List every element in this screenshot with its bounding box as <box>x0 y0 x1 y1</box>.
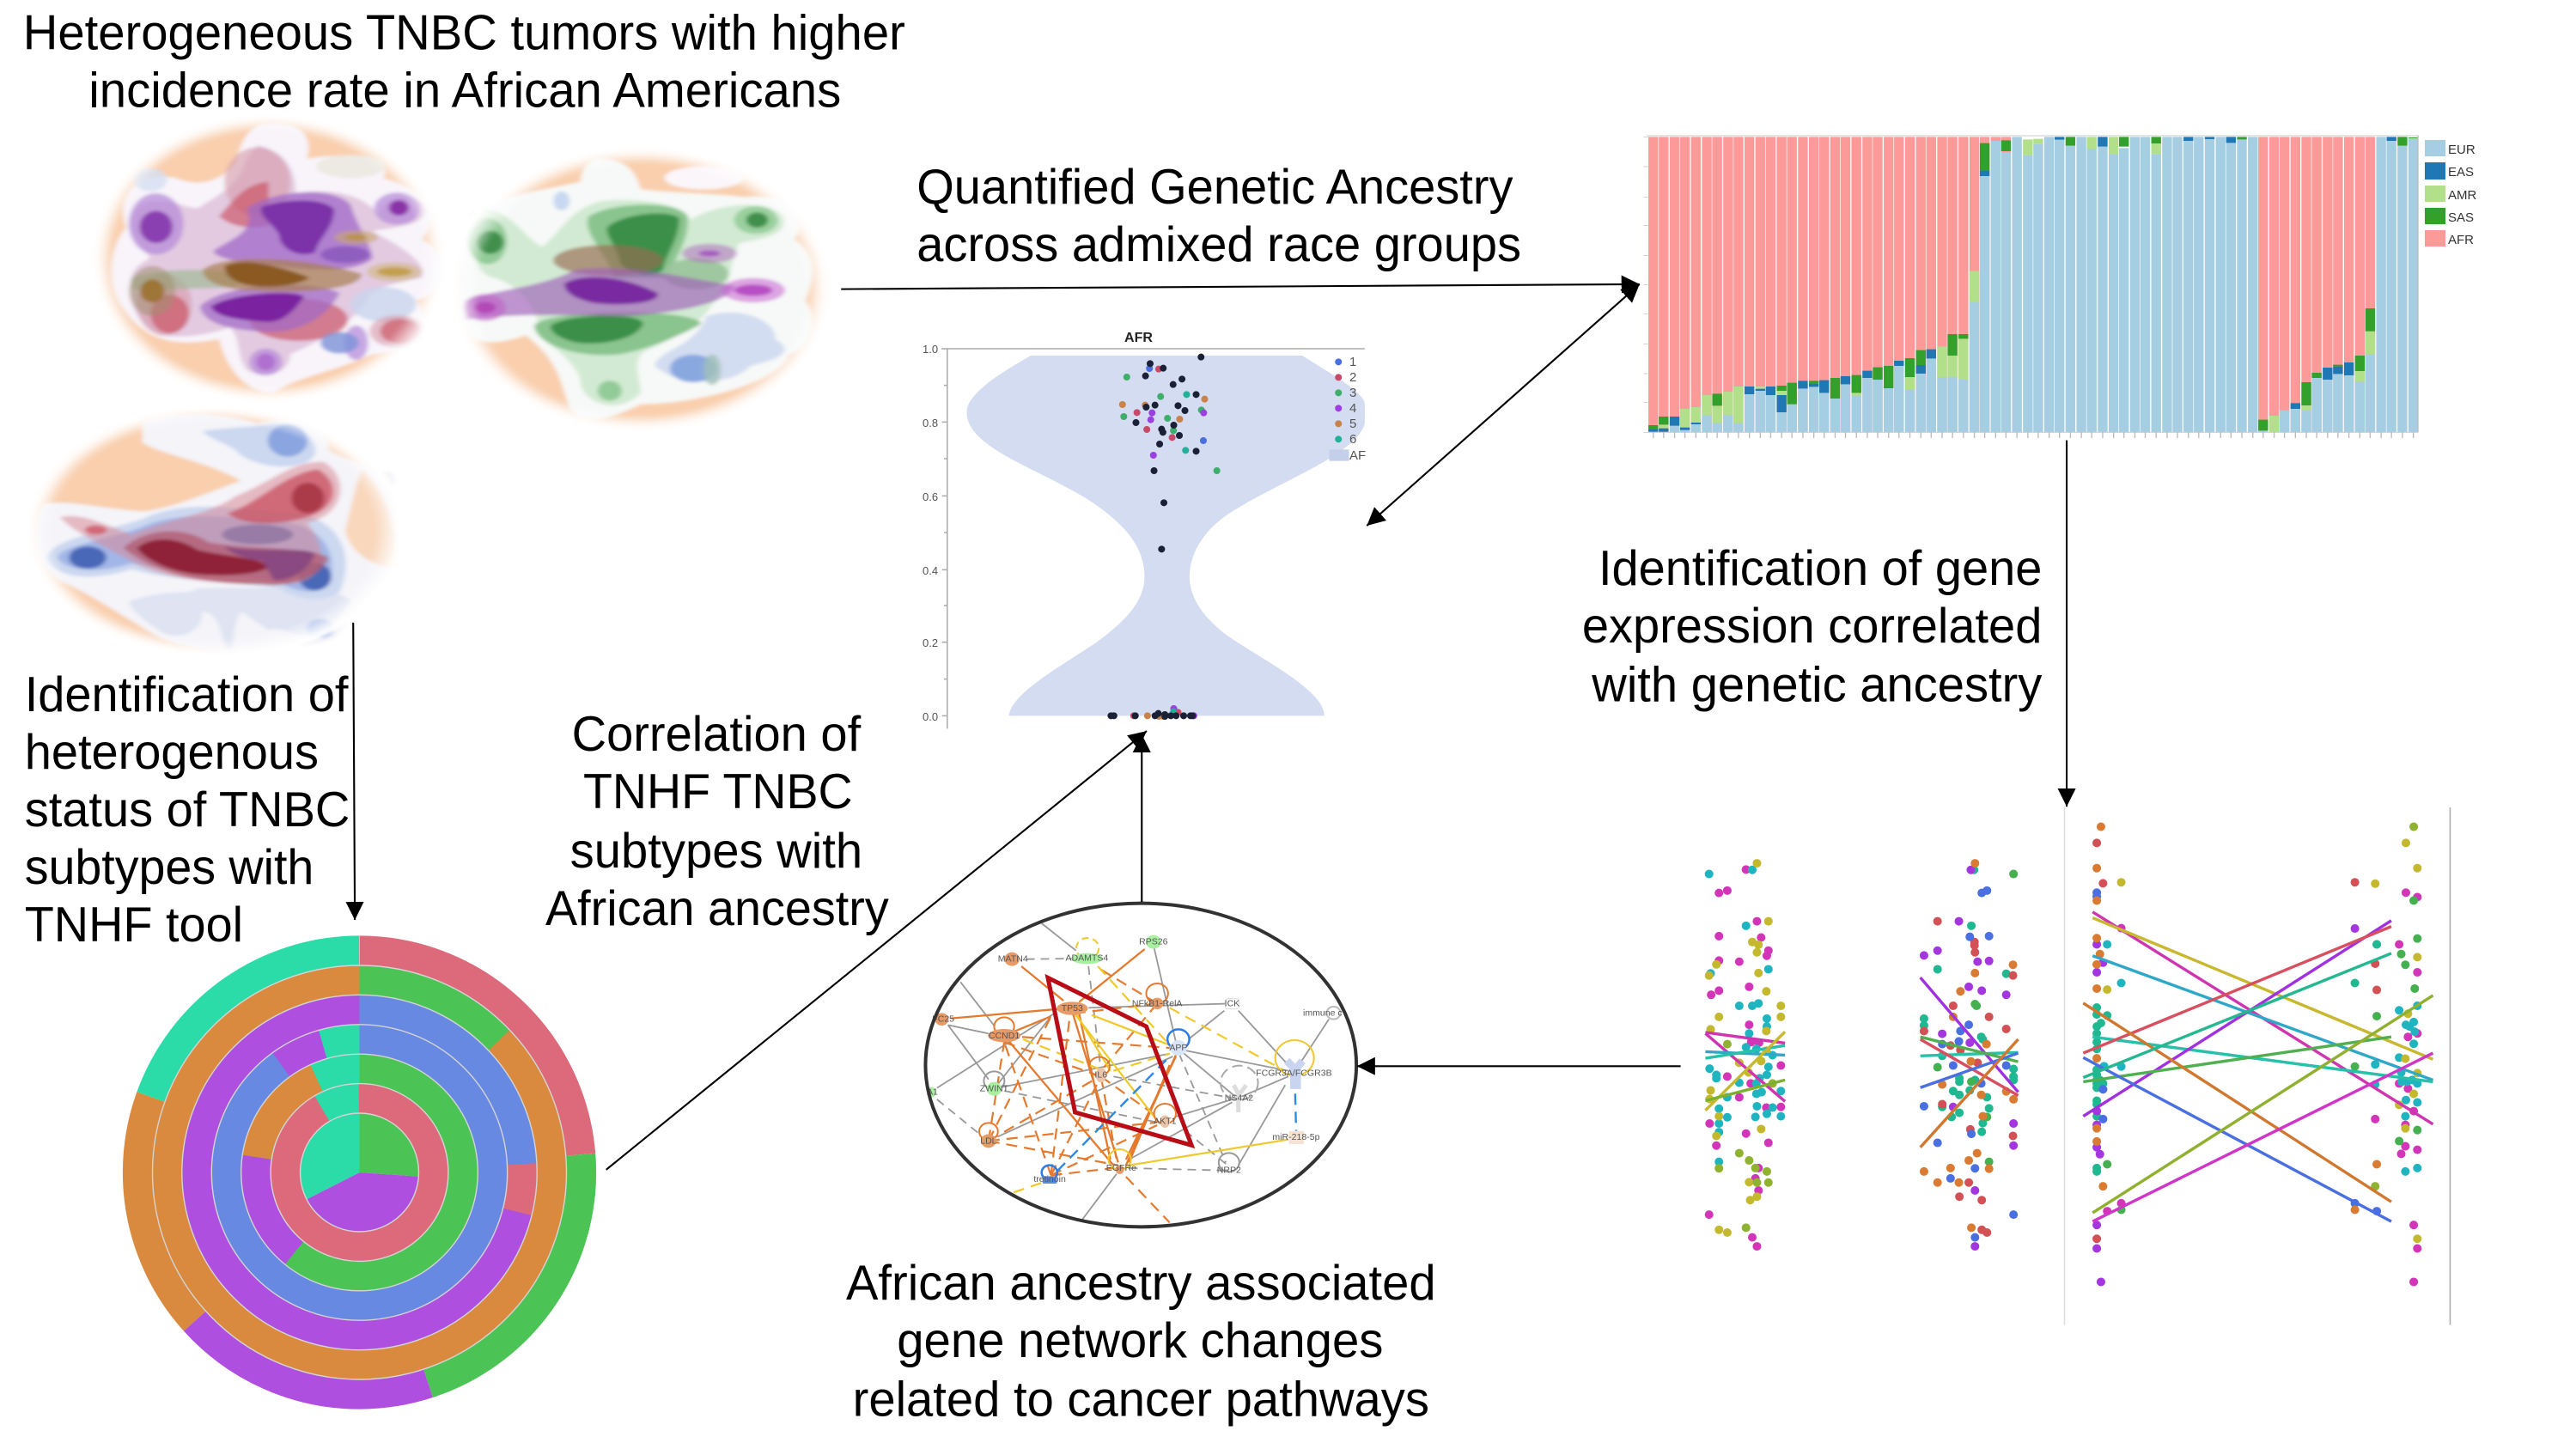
gene network in ellipse: CCND1 <box>989 1032 1020 1041</box>
gene network in ellipse: NS4A2 <box>1225 1094 1254 1104</box>
caption: gene expression: Identification of gene <box>1599 541 2042 596</box>
caption: correlation <box>545 707 889 936</box>
bar chart legend <box>2425 140 2477 247</box>
arrow: sunburst to violin <box>606 731 1147 1170</box>
gene network in ellipse: miR-218-5p <box>1272 1133 1320 1142</box>
arrow: tumors to sunburst <box>353 623 355 920</box>
caption: TNHF tool: heterogenous <box>25 725 319 780</box>
violin plot labels: 5 <box>1349 417 1356 431</box>
gene network in ellipse <box>925 904 1356 1227</box>
headings and captions <box>23 5 2043 1428</box>
caption: TNHF tool: Identification of <box>25 667 349 722</box>
bar chart legend: AMR <box>2448 188 2477 203</box>
violin plot labels: 0.8 <box>923 417 938 429</box>
caption: correlation: African ancestry <box>545 881 889 936</box>
gene network in ellipse: LDL <box>980 1137 997 1146</box>
caption: quantified genetic ancestry: across admixed race groups <box>917 217 1521 272</box>
caption: TNHF tool <box>25 667 350 953</box>
bar chart legend: SAS <box>2448 210 2474 225</box>
caption: correlation: TNHF TNBC <box>583 764 853 819</box>
gene network in ellipse: EGFRe <box>1106 1164 1136 1173</box>
caption: TNHF tool: subtypes with <box>25 840 314 895</box>
stacked bar chart: genetic ancestry <box>1643 136 2477 438</box>
violin plot labels: 3 <box>1349 386 1356 400</box>
caption: quantified genetic ancestry <box>917 160 1521 272</box>
gene network in ellipse: IL6 <box>1094 1071 1107 1081</box>
violin plot labels: 2 <box>1349 370 1356 385</box>
caption: TNHF tool: TNHF tool <box>25 898 243 953</box>
violin plot labels: 1 <box>1349 355 1356 369</box>
bar chart legend: EAS <box>2448 165 2474 180</box>
caption: gene network <box>846 1256 1436 1428</box>
violin plot labels: 0.4 <box>923 564 938 577</box>
gene network in ellipse: A1 <box>927 1088 938 1097</box>
gene network in ellipse: immune c <box>1303 1009 1343 1018</box>
violin plot labels <box>923 331 1366 723</box>
violin plot: AFR ancestry <box>923 331 1366 728</box>
caption: gene expression: with genetic ancestry <box>1591 658 2043 713</box>
violin plot labels: AF <box>1349 448 1366 463</box>
gene network in ellipse: ICK <box>1225 1000 1239 1008</box>
caption: gene network: African ancestry associated <box>846 1256 1436 1311</box>
caption: quantified genetic ancestry: Quantified Genetic Ancestry <box>917 160 1513 215</box>
gene network in ellipse: FCGR3A/FCGR3B <box>1256 1069 1332 1079</box>
gene network in ellipse: APP <box>1169 1044 1188 1053</box>
arrows between panels <box>353 284 2067 1170</box>
caption: gene network: gene network changes <box>897 1313 1383 1368</box>
gene network in ellipse: tretinoin <box>1033 1175 1066 1184</box>
sunburst: TNBC subtype rings <box>137 951 582 1394</box>
violin plot labels: 4 <box>1349 401 1356 416</box>
heading: heterogeneous tumors <box>23 5 905 118</box>
arrow: bars to scatter <box>2066 441 2067 807</box>
caption: gene network: related to cancer pathways <box>853 1373 1429 1428</box>
caption: TNHF tool: status of TNBC <box>25 782 350 837</box>
violin plot labels: 0.0 <box>923 710 938 723</box>
heading: heterogeneous tumors: Heterogeneous TNBC tumors with higher <box>23 5 905 60</box>
tumor density map 2 <box>447 142 836 436</box>
slope scatter plots: gene expression vs ancestry <box>1705 807 2450 1325</box>
violin plot labels: 0.2 <box>923 636 938 649</box>
bar chart legend: EUR <box>2448 143 2476 157</box>
gene network in ellipse: ZWINT <box>980 1085 1008 1094</box>
caption: correlation: subtypes with <box>570 824 862 879</box>
caption: gene expression <box>1582 541 2043 713</box>
tumor density map 3 <box>22 402 405 659</box>
violin plot labels: 1.0 <box>923 343 938 356</box>
violin plot labels: AFR <box>1124 331 1153 345</box>
heading: heterogeneous tumors: incidence rate in African Americans <box>88 63 841 118</box>
gene network in ellipse: TP53 <box>1062 1004 1083 1014</box>
violin plot labels: 6 <box>1349 432 1356 447</box>
gene network in ellipse: NRP2 <box>1217 1166 1241 1176</box>
gene network in ellipse: NFkB1-RelA <box>1132 1000 1183 1008</box>
arrow: network to violin <box>1141 734 1142 902</box>
tumor density map 1 <box>85 109 452 408</box>
arrow: bars to violin, double headed <box>1367 284 1640 526</box>
violin plot labels: 0.6 <box>923 490 938 503</box>
gene network in ellipse: AKT1 <box>1154 1117 1177 1126</box>
gene network in ellipse: FC25 <box>932 1015 954 1025</box>
arrow: scatter to network <box>1357 1065 1681 1067</box>
arrow: tumors to ancestry bars <box>841 284 1640 289</box>
caption: gene expression: expression correlated <box>1582 599 2042 654</box>
gene network in ellipse: MATN4 <box>998 955 1028 965</box>
gene network in ellipse: RPS26 <box>1139 938 1168 947</box>
bar chart legend: AFR <box>2448 233 2474 247</box>
gene network in ellipse: ADAMTS4 <box>1066 954 1109 964</box>
caption: correlation: Correlation of <box>572 707 862 762</box>
